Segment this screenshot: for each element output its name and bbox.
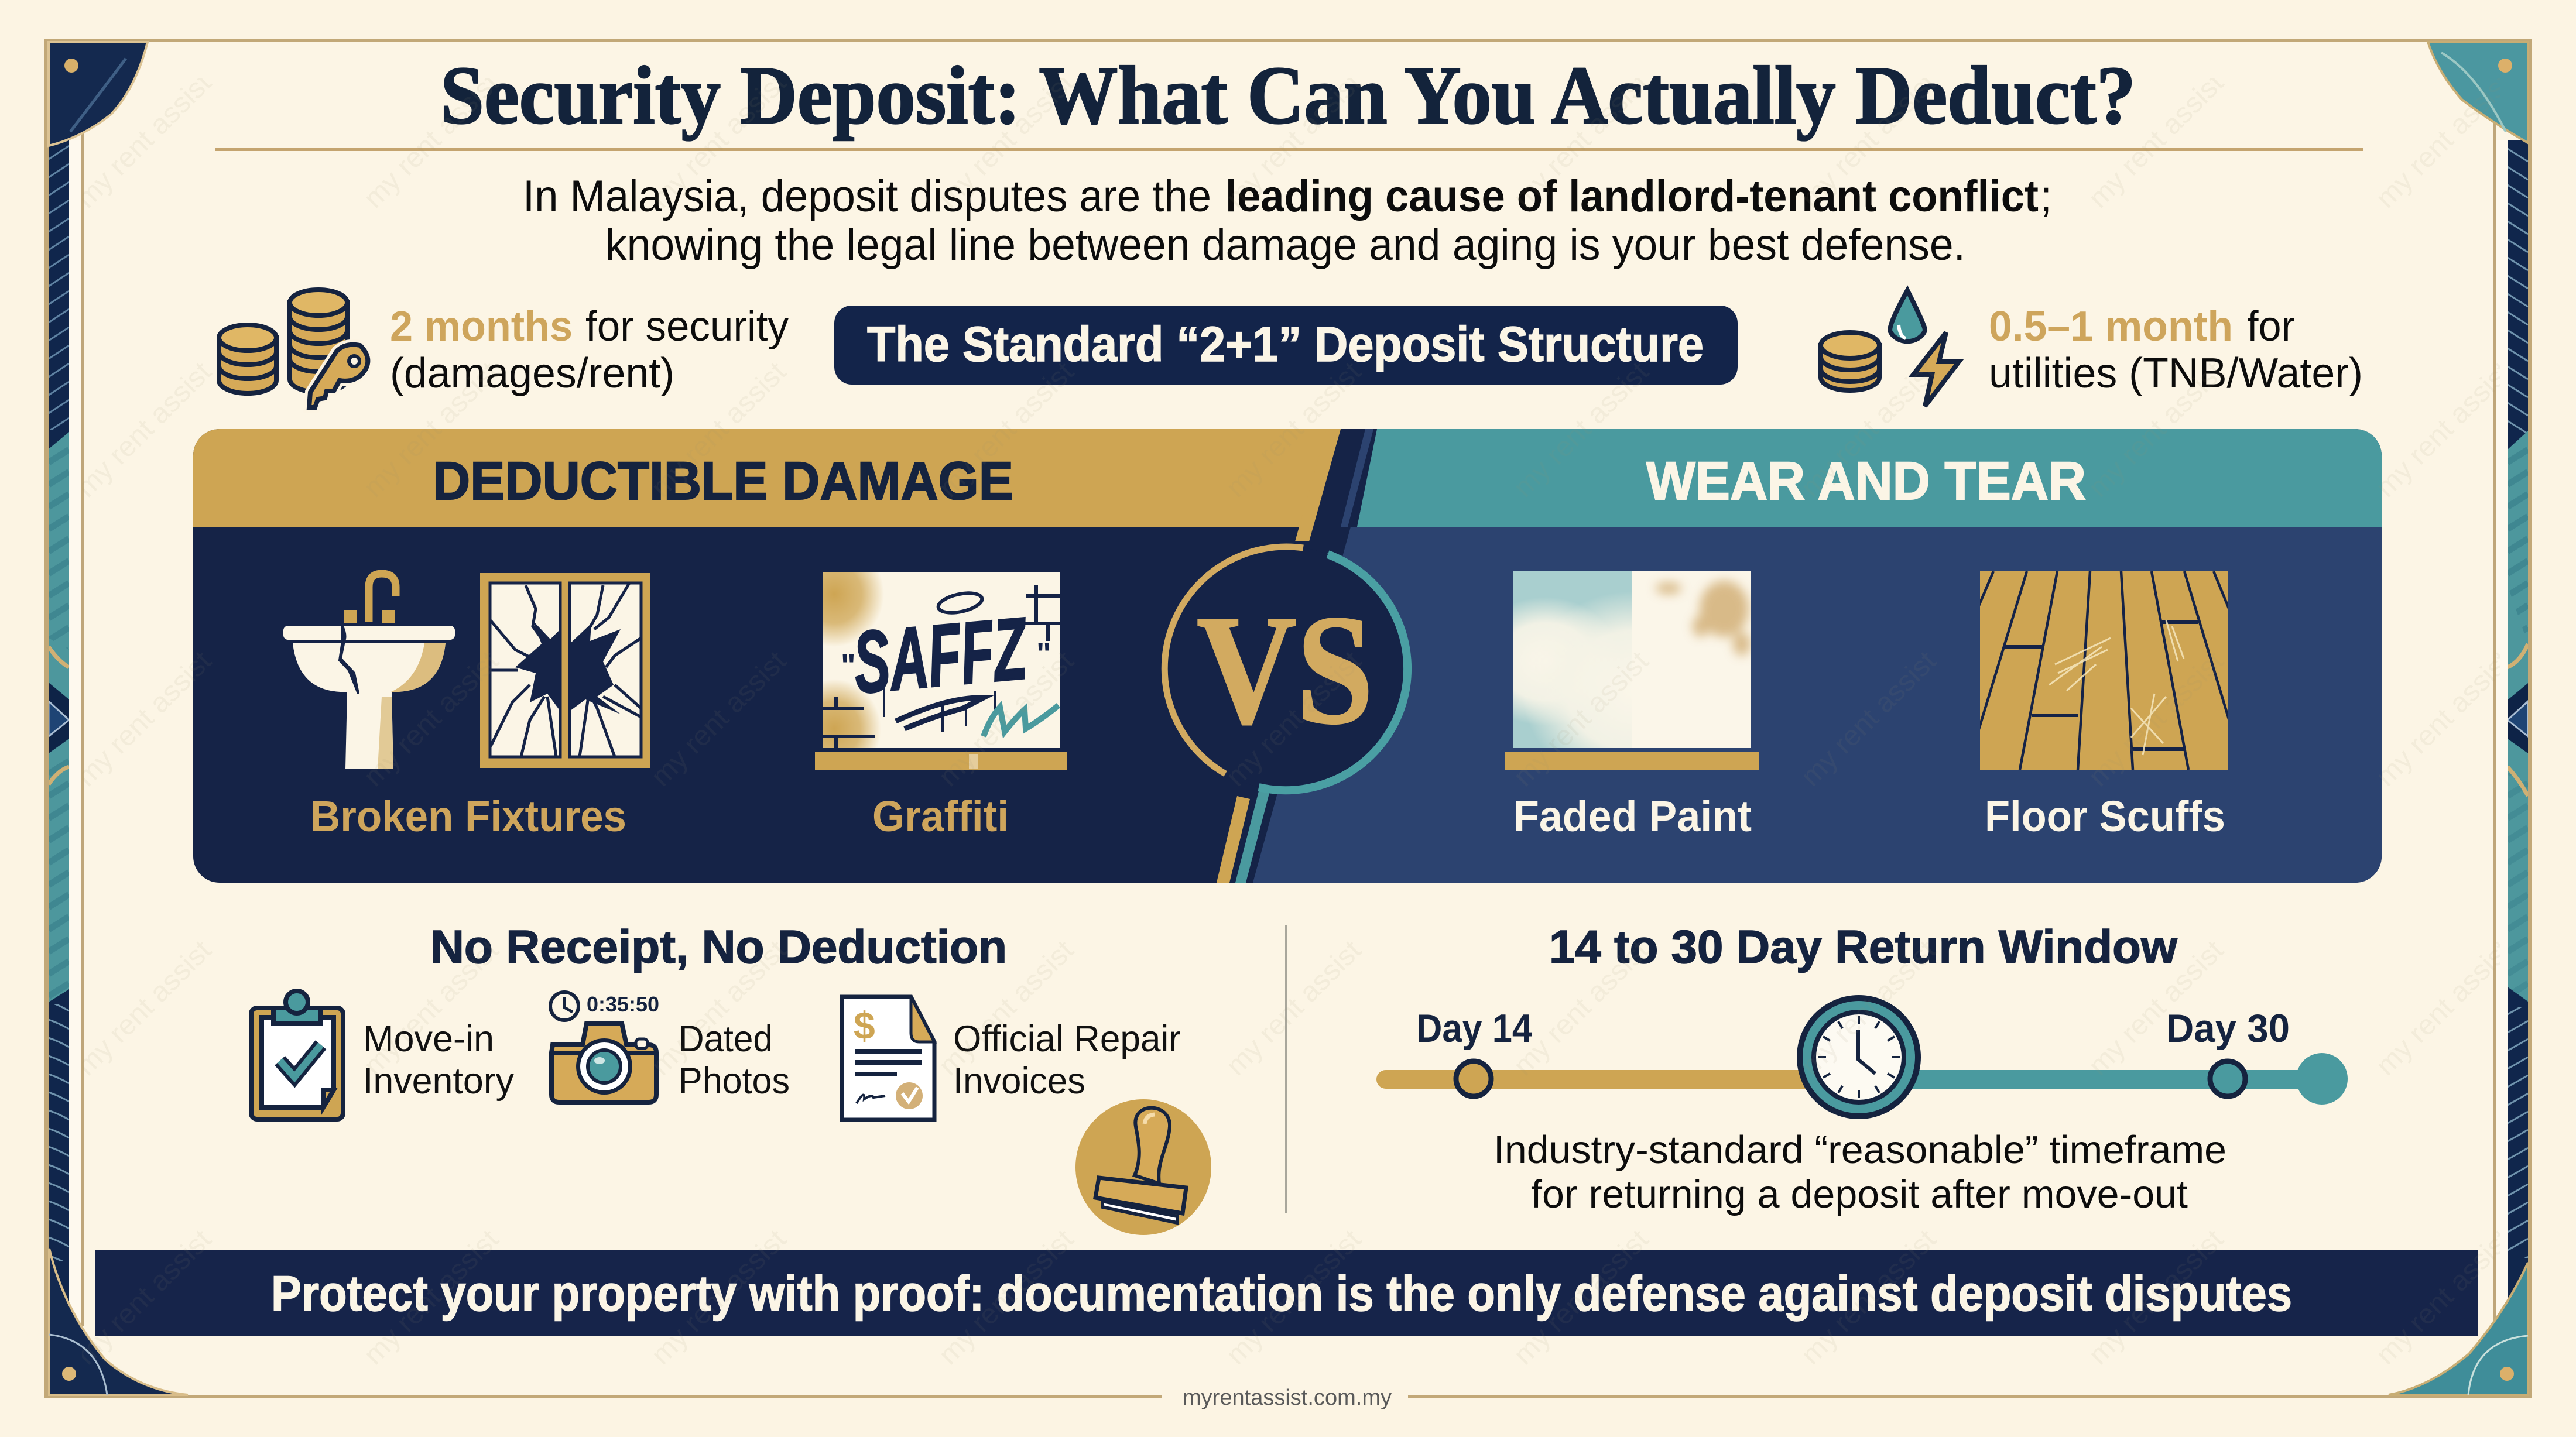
text: dated photos: Dated <box>679 1018 773 1059</box>
label: broken fixtures: Broken Fixtures <box>310 792 626 841</box>
caption: Industry-standard “reasonable” timeframe <box>1493 1128 2226 1172</box>
icon: clock <box>1797 995 1921 1119</box>
footer url: myrentassist.com.my <box>1183 1385 1392 1410</box>
icon: graffiti wall <box>815 572 1067 770</box>
text: dated photos: Photos <box>679 1061 790 1102</box>
heading pill: deposit structure: The Standard “2+1” Deposit Structure <box>867 317 1704 372</box>
divider stripes <box>1217 429 1373 883</box>
icon: stamp <box>1075 1099 1211 1235</box>
stat: utilities deposit: for <box>2247 303 2295 350</box>
icon: repair invoice: $ <box>854 1004 875 1047</box>
text: move-in inventory <box>363 1018 514 1102</box>
header: deductible damage: DEDUCTIBLE DAMAGE <box>433 451 1013 511</box>
caption <box>1493 1128 2226 1216</box>
corner: top right <box>2428 42 2528 143</box>
timeline <box>1376 995 2348 1119</box>
header: wear and tear: WEAR AND TEAR <box>1646 451 2086 511</box>
icon: graffiti wall: " <box>1036 636 1051 671</box>
icon: coins and key <box>219 290 368 407</box>
heading: 14 to 30 Day Return Window <box>1549 921 2178 973</box>
takeaway banner: Protect your property with proof: documentation is the only defense against deposit disputes <box>271 1266 2292 1322</box>
stat: security deposit <box>219 290 789 407</box>
icon: camera with timestamp <box>550 992 659 1102</box>
stat: utilities deposit: 0.5–1 month <box>1989 303 2233 350</box>
heading pill: deposit structure <box>834 306 1738 385</box>
intro text: knowing the legal line between damage and aging is your best defense. <box>605 220 1965 270</box>
label: day 14: Day 14 <box>1416 1006 1532 1051</box>
icon: clipboard <box>251 991 343 1119</box>
stat: utilities deposit: utilities (TNB/Water) <box>1989 350 2363 397</box>
icon: repair invoice <box>842 997 934 1120</box>
vs badge: VS <box>1197 582 1373 756</box>
title: Security Deposit: What Can You Actually Deduct? <box>440 50 2136 141</box>
corner: top left <box>49 42 148 146</box>
text: official repair invoices: Invoices <box>953 1061 1085 1102</box>
corner: bottom left <box>49 1249 188 1395</box>
stat: security deposit: 2 months <box>390 303 573 350</box>
text: official repair invoices: Official Repair <box>953 1018 1181 1059</box>
intro text: In Malaysia, deposit disputes are the <box>523 172 1211 221</box>
section: return window <box>1376 921 2348 1216</box>
icon: broken sink <box>283 574 455 769</box>
takeaway banner <box>95 1250 2478 1336</box>
section: no receipt, no deduction <box>251 921 1211 1235</box>
intro text: leading cause of landlord-tenant conflict <box>1225 172 2039 221</box>
label: graffiti: Graffiti <box>872 792 1009 841</box>
icon: coin, drop and bolt <box>1821 290 1959 406</box>
intro text <box>523 172 2052 270</box>
caption: for returning a deposit after move-out <box>1531 1172 2188 1216</box>
stat: utilities deposit <box>1821 290 2363 406</box>
text: move-in inventory: Move-in <box>363 1018 494 1059</box>
label: faded paint: Faded Paint <box>1513 792 1752 841</box>
corner: bottom right <box>2389 1263 2528 1395</box>
heading: No Receipt, No Deduction <box>430 921 1007 973</box>
icon: faded paint wall <box>1505 571 1759 770</box>
stat: security deposit: for security <box>585 303 789 350</box>
icon: camera with timestamp: 0:35:50 <box>587 992 659 1016</box>
right border strip <box>2508 140 2528 1393</box>
intro text: ; <box>2040 172 2052 221</box>
vs badge <box>1164 547 1408 790</box>
comparison panel <box>193 429 2382 883</box>
left border strip <box>49 140 69 1393</box>
icon: shattered window <box>480 573 650 768</box>
text: move-in inventory: Inventory <box>363 1061 514 1102</box>
icon: graffiti wall: SAFFZ <box>849 599 1032 712</box>
label: day 30: Day 30 <box>2166 1006 2290 1051</box>
label: floor scuffs: Floor Scuffs <box>1985 792 2225 841</box>
text: official repair invoices <box>953 1018 1181 1102</box>
icon: scuffed floor <box>1980 571 2228 770</box>
text: dated photos <box>679 1018 790 1102</box>
stat: security deposit: (damages/rent) <box>390 350 674 397</box>
icon: graffiti wall: " <box>841 648 856 683</box>
